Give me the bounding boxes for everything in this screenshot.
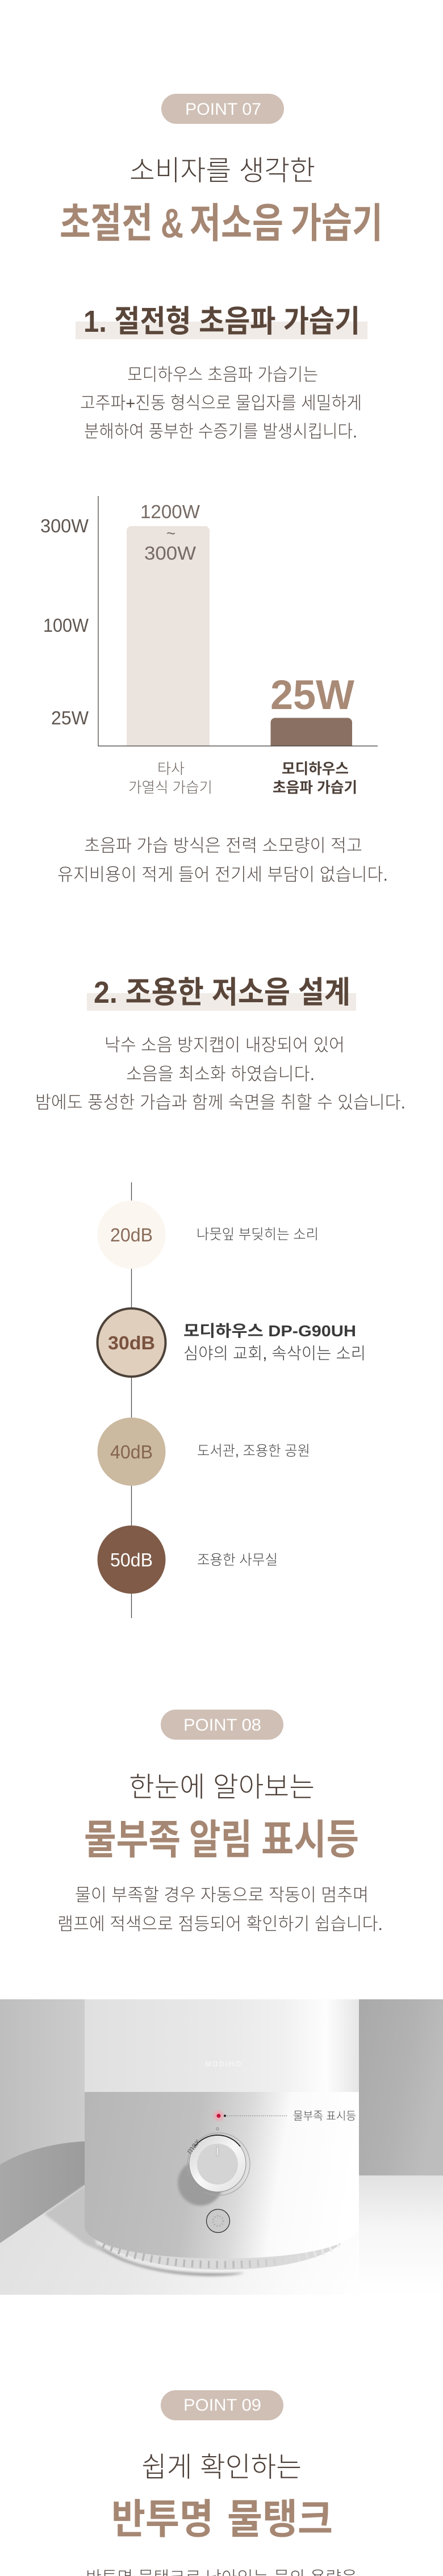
level: 50dB: 조용한 사무실 <box>197 1552 278 1568</box>
title: 가습기 <box>291 201 383 247</box>
left wall <box>0 1999 85 2243</box>
right wall <box>359 1999 443 2175</box>
badge: POINT 07 <box>161 94 284 124</box>
text block: noise description <box>35 1035 406 1112</box>
title: 저소음 <box>190 201 283 247</box>
level: 40dB <box>98 1418 310 1486</box>
title <box>111 2497 333 2542</box>
level: 30dB highlighted: 30dB <box>108 1332 155 1353</box>
text block: chart conclusion: 유지비용이 적게 들어 전기세 부담이 없습니다. <box>57 865 388 885</box>
level: 30dB highlighted <box>98 1308 366 1377</box>
section: point 08 header <box>57 1710 383 1934</box>
dial: max <box>185 2137 202 2156</box>
heading 1: power saving ultrasonic humidifier: 1. 절전형 초음파 가습기 <box>83 305 360 339</box>
level: 50dB <box>98 1525 278 1594</box>
title: 알림 <box>189 1818 252 1863</box>
text block: 램프에 적색으로 점등되어 확인하기 쉽습니다. <box>57 1914 383 1934</box>
level: 20dB <box>98 1201 319 1269</box>
title: 표시등 <box>261 1818 359 1863</box>
text block: noise description: 낙수 소음 방지캡이 내장되어 있어 <box>105 1035 345 1055</box>
badge: POINT 09: POINT 09 <box>183 2396 261 2415</box>
category label: modihouse: 모디하우스 <box>282 760 349 777</box>
dial shadow <box>178 2160 223 2206</box>
text block: noise description: 소음을 최소화 하였습니다. <box>126 1064 315 1084</box>
category label: other brands <box>128 760 212 796</box>
wall shadow <box>0 2141 85 2243</box>
title: 물탱크 <box>227 2497 333 2542</box>
text block: ultrasonic description <box>80 365 362 441</box>
dial <box>176 2121 261 2207</box>
level: 20dB: 나뭇잎 부딪히는 소리 <box>197 1227 319 1243</box>
indicator LED <box>214 2111 224 2121</box>
title: 물부족 <box>84 1818 181 1863</box>
level: 30dB highlighted: 모디하우스 DP-G90UH <box>183 1322 356 1340</box>
text block: ultrasonic description: 분해하여 풍부한 수증기를 발생시킵니다. <box>84 422 357 441</box>
value label: other brands: ~ <box>166 524 175 542</box>
subtitle: 쉽게 확인하는 <box>141 2452 302 2483</box>
callout: water indicator <box>224 2110 356 2123</box>
text block <box>57 1885 383 1934</box>
heading 2: quiet low-noise design: 2. 조용한 저소음 설계 <box>94 976 350 1010</box>
level: 40dB: 도서관, 조용한 공원 <box>197 1443 310 1459</box>
title: & <box>161 201 183 247</box>
title: 초절전 <box>60 201 153 247</box>
level: 20dB: 20dB <box>110 1224 153 1245</box>
badge: POINT 09 <box>161 2390 283 2420</box>
base body <box>85 2092 359 2258</box>
title <box>84 1818 359 1863</box>
photo: humidifier base with water indicator <box>0 1999 443 2295</box>
badge: POINT 08 <box>161 1710 283 1740</box>
subtitle: 소비자를 생각한 <box>129 156 315 186</box>
category label: modihouse: 초음파 가습기 <box>273 779 357 796</box>
text block: ultrasonic description: 고주파+진동 형식으로 물입자를 세밀하게 <box>80 393 362 413</box>
category label: other brands: 가열식 가습기 <box>128 779 212 796</box>
bar: modihouse <box>270 718 352 746</box>
text block: chart conclusion <box>57 836 388 885</box>
value label: other brands <box>140 501 200 564</box>
category label: modihouse <box>273 760 357 796</box>
y axis labels: 100W <box>43 615 89 636</box>
badge: POINT 07: POINT 07 <box>185 100 261 119</box>
text block: ultrasonic description: 모디하우스 초음파 가습기는 <box>127 365 318 385</box>
light button <box>207 2209 229 2233</box>
bar chart: power consumption <box>40 496 378 796</box>
base shadow <box>97 2244 244 2276</box>
category label: other brands: 타사 <box>157 760 185 777</box>
title <box>60 201 383 247</box>
bar: other brands <box>127 526 210 746</box>
value label: other brands: 300W <box>144 543 197 564</box>
y axis labels: 25W <box>51 707 89 728</box>
axes <box>98 496 378 746</box>
section: point 07 header <box>60 94 383 247</box>
text block: 물이 부족할 경우 자동으로 작동이 멈추며 <box>75 1885 369 1905</box>
badge: POINT 08: POINT 08 <box>183 1716 261 1735</box>
level: 40dB: 40dB <box>110 1441 153 1462</box>
floor shadow <box>44 2185 131 2264</box>
decibel scale timeline <box>98 1182 366 1618</box>
callout: water indicator: 물부족 표시등 <box>293 2110 356 2123</box>
level: 30dB highlighted: 심야의 교회, 속삭이는 소리 <box>183 1345 366 1363</box>
photo floor <box>0 2136 443 2295</box>
grill ring <box>101 2233 341 2270</box>
section: point 09 header <box>86 2390 357 2576</box>
text block: chart conclusion: 초음파 가습 방식은 전력 소모량이 적고 <box>84 836 362 856</box>
y axis labels: 300W <box>40 515 89 536</box>
level: 50dB: 50dB <box>110 1549 153 1570</box>
right floor <box>359 2175 443 2295</box>
title: 반투명 <box>111 2497 214 2542</box>
text block: noise description: 밤에도 풍성한 가습과 함께 숙면을 취할 수 있습니다. <box>35 1093 406 1112</box>
subtitle: 한눈에 알아보는 <box>129 1772 315 1803</box>
faint logo: MODIHO <box>205 2060 242 2068</box>
value label: other brands: 1200W <box>140 501 200 522</box>
y axis labels <box>40 515 89 728</box>
upper tank <box>85 1999 359 2092</box>
value label: 25W: 25W <box>270 672 354 718</box>
